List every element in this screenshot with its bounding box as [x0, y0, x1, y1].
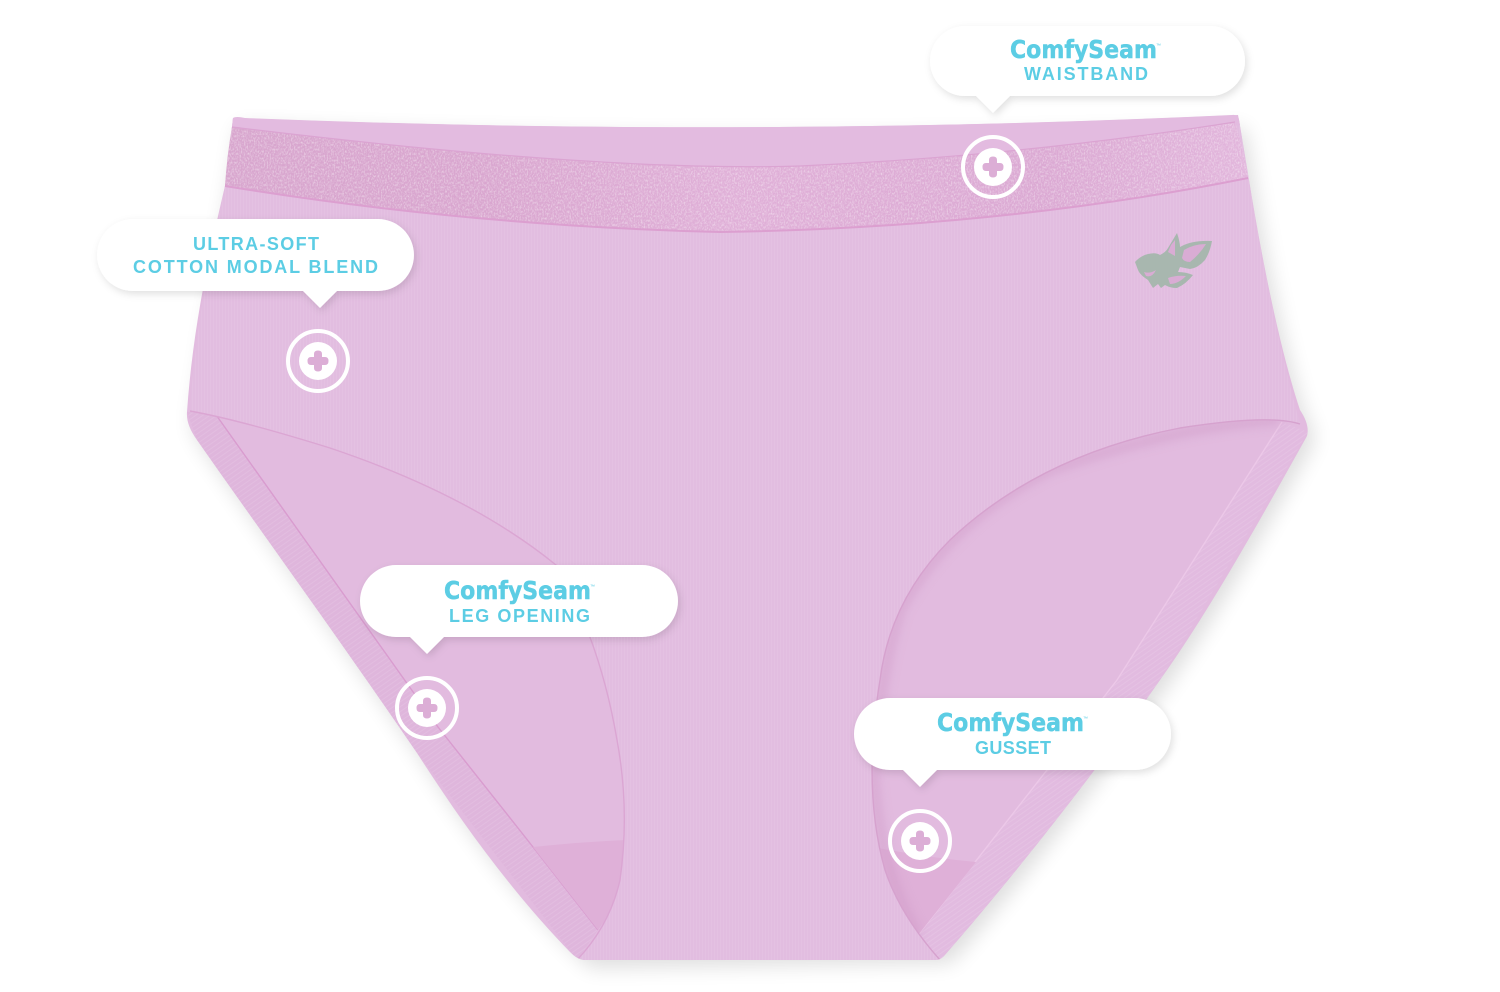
logo: ComfySeam: ComfySeam — [1010, 35, 1157, 64]
icon: plus hotspot gusset — [890, 811, 950, 871]
right gusset panel — [885, 850, 976, 933]
right seam stitch — [918, 422, 1282, 935]
callout: ComfySeam waistband — [930, 26, 1245, 113]
icon: plus hotspot fabric — [288, 331, 348, 391]
icon: plus hotspot waistband — [963, 137, 1023, 197]
waistband stitching — [225, 178, 1248, 232]
callout: ComfySeam leg opening — [360, 565, 678, 654]
elastic waistband — [225, 115, 1248, 232]
trademark: ™ — [1156, 43, 1161, 49]
label: waistband: WAISTBAND — [1024, 64, 1148, 84]
left gusset panel — [533, 840, 626, 930]
trademark: ™ — [1083, 716, 1088, 722]
garment drop shadow — [193, 126, 1314, 968]
label: gusset: GUSSET — [975, 738, 1051, 758]
label: ultra-soft: ULTRA-SOFT — [193, 234, 319, 254]
callout: ultra-soft cotton modal blend — [97, 219, 414, 308]
trademark: ™ — [590, 584, 595, 590]
icon: goldfish logo — [1135, 233, 1212, 288]
garment: briefs — [187, 115, 1314, 968]
left seam stitch — [214, 412, 598, 930]
logo: ComfySeam: ComfySeam — [444, 576, 591, 605]
front leg edges — [190, 411, 624, 960]
shading under front panel — [874, 420, 1280, 935]
left leg binding — [197, 440, 578, 958]
garment silhouette — [187, 115, 1308, 960]
label: leg opening: LEG OPENING — [449, 606, 590, 626]
logo: ComfySeam: ComfySeam — [937, 708, 1084, 737]
waistband inner back — [232, 115, 1240, 167]
label: cotton modal blend: COTTON MODAL BLEND — [133, 257, 378, 277]
icon: plus hotspot leg opening — [397, 678, 457, 738]
callout: ComfySeam gusset — [854, 698, 1171, 787]
front panel — [190, 118, 1300, 960]
waistband elastic — [225, 122, 1248, 232]
right leg binding — [941, 694, 1150, 958]
